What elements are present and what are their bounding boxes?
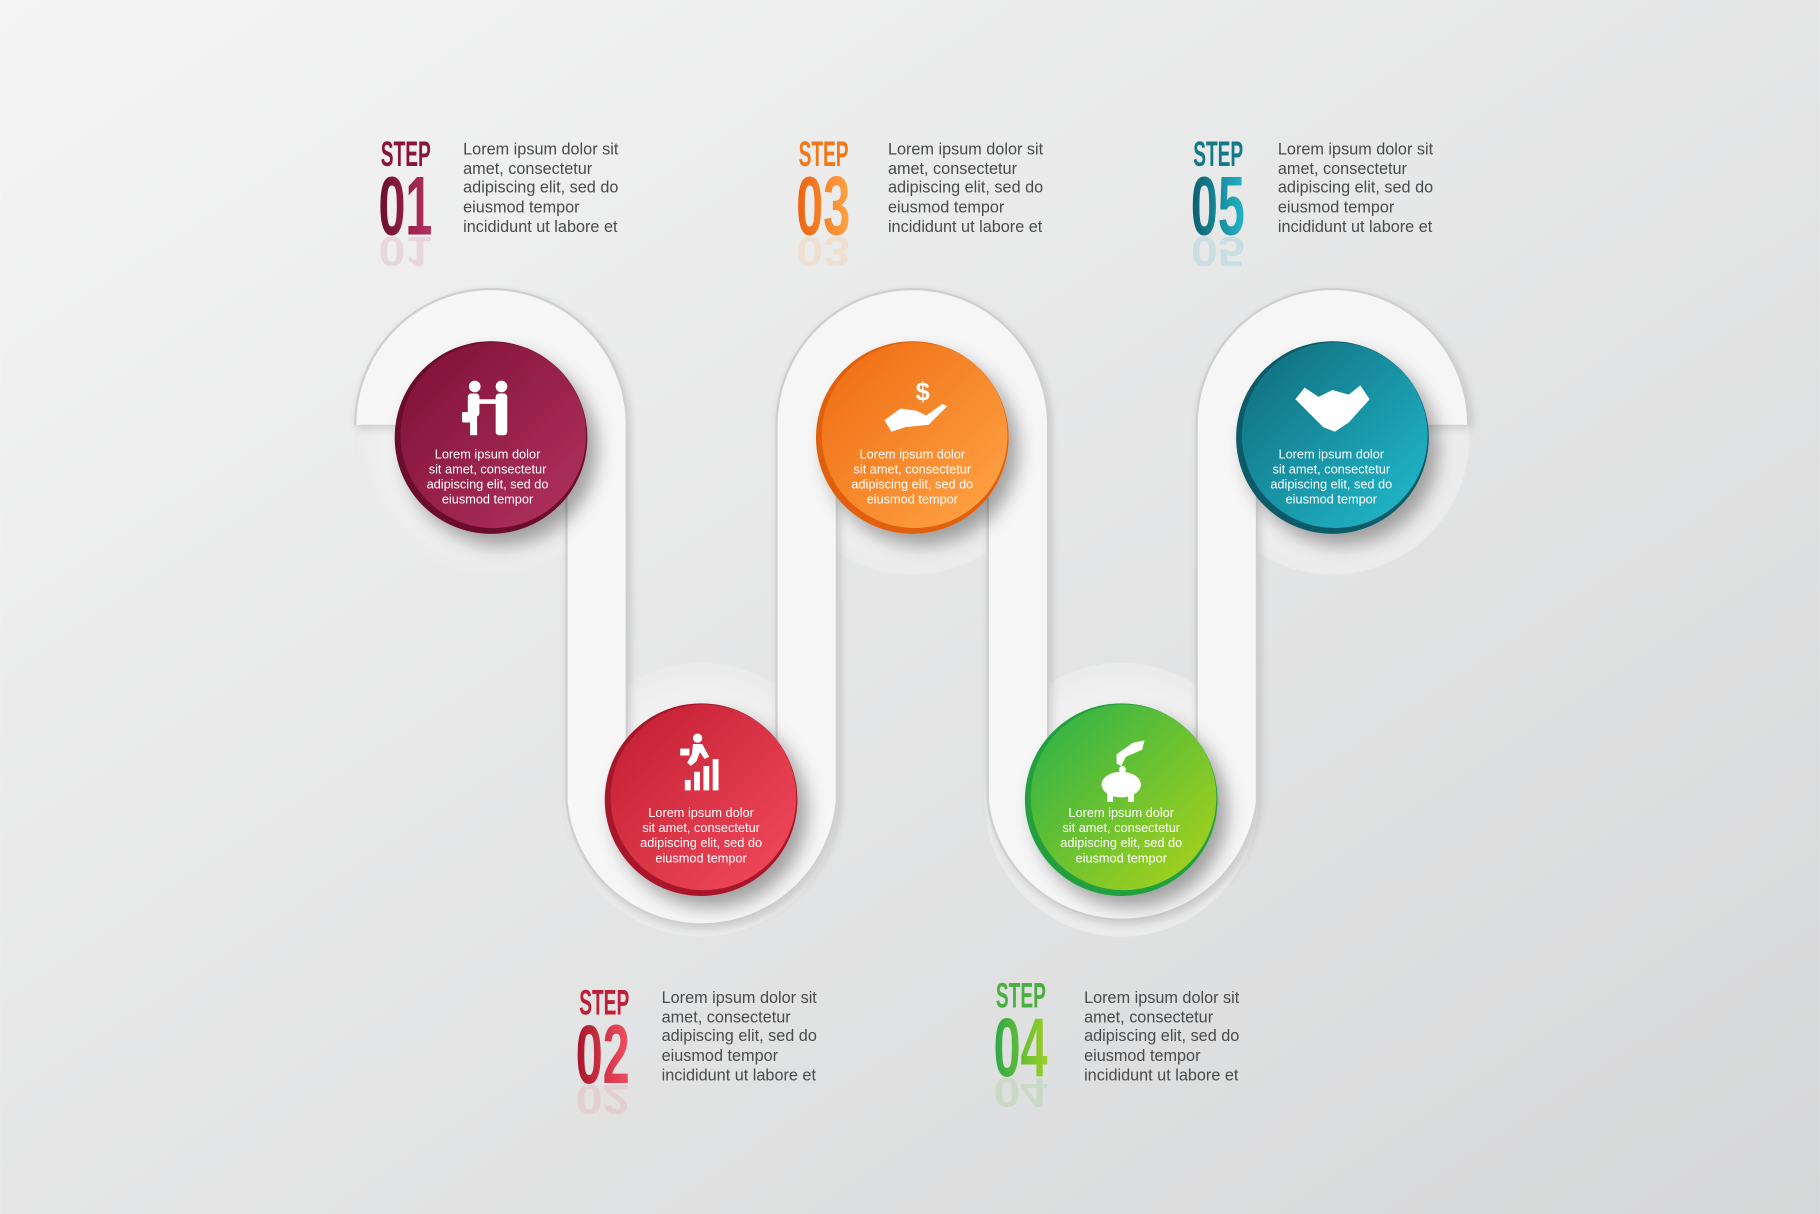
halos [354,301,1469,937]
step 05 label: 05 [1191,228,1245,275]
circle 5 [1236,341,1429,534]
circle 1: adipiscing elit, sed do [427,477,548,492]
circle 1 [395,341,587,534]
circle 1: Lorem ipsum dolor [435,446,541,461]
circle 5: sit amet, consectetur [1272,462,1391,477]
step 02 label [576,983,630,1123]
circle 3: adipiscing elit, sed do [851,477,973,492]
step 03 text: amet, consectetur [888,160,1018,178]
circle 3: Lorem ipsum dolor [860,446,966,461]
icon: growth chart [680,734,718,790]
step 04 label: STEP [996,976,1046,1015]
step 05 label: STEP [1193,135,1243,173]
step 04 text: Lorem ipsum dolor sit [1084,989,1240,1007]
step 02 text: Lorem ipsum dolor sit [662,989,817,1007]
step 04 text: amet, consectetur [1084,1008,1214,1026]
circle 3: sit amet, consectetur [854,462,972,477]
icon: handshake people [462,381,507,435]
step 03 label: 03 [796,160,850,253]
circle 4 [1025,703,1218,896]
icon: hand with dollar: $ [916,378,930,406]
circle 1: sit amet, consectetur [429,462,547,477]
circle 3: eiusmod tempor [867,492,959,507]
circle 2: adipiscing elit, sed do [640,835,762,850]
icon: hand with dollar [884,378,947,432]
step 03 label [796,135,850,275]
step 02 label: 02 [576,1008,630,1101]
step 05 text: amet, consectetur [1278,160,1408,178]
circle 3 [816,341,1009,534]
step 02 text: incididunt ut labore et [662,1067,816,1085]
circle 4: Lorem ipsum dolor [1068,805,1175,820]
serpentine track [385,319,1438,894]
step 02 text: eiusmod tempor [662,1047,779,1065]
step 01 label: 01 [378,160,432,253]
circle 4: adipiscing elit, sed do [1060,835,1182,850]
step 03 text: Lorem ipsum dolor sit [888,140,1044,158]
step 02 text: adipiscing elit, sed do [662,1027,817,1045]
step 01 label: STEP [381,135,431,173]
step 03 text: incididunt ut labore et [888,218,1043,236]
step 01 label [378,135,432,275]
step 03 text: adipiscing elit, sed do [888,179,1043,197]
circle 5: Lorem ipsum dolor [1279,446,1385,461]
circle 2: sit amet, consectetur [642,820,761,835]
step 01 label: 01 [378,228,432,275]
step 03 text: eiusmod tempor [888,198,1005,216]
step 05 text: incididunt ut labore et [1278,218,1433,236]
step 01 text: eiusmod tempor [463,198,580,216]
step 04 label [994,976,1047,1116]
step 01 text: incididunt ut labore et [463,218,618,236]
step 04 label: 04 [994,1069,1047,1116]
circle 2 [605,703,797,896]
step 04 label: 04 [994,1001,1047,1094]
step 05 text: adipiscing elit, sed do [1278,179,1433,197]
circle 5: eiusmod tempor [1286,492,1378,507]
step 03 label: STEP [799,135,849,173]
circle 2: eiusmod tempor [655,850,748,865]
step 05 label: 05 [1191,160,1245,253]
step 02 label: STEP [579,983,629,1022]
step 04 text: eiusmod tempor [1084,1047,1201,1065]
step 05 text: eiusmod tempor [1278,198,1395,216]
step 04 text: adipiscing elit, sed do [1084,1027,1239,1045]
icon: piggy bank [1102,740,1144,802]
step 01 text: Lorem ipsum dolor sit [463,140,619,158]
circle 4: sit amet, consectetur [1062,820,1181,835]
step 04 text: incididunt ut labore et [1084,1067,1239,1085]
icon: handshake [1295,385,1370,432]
step 01 text: adipiscing elit, sed do [463,179,618,197]
step 02 label: 02 [576,1076,630,1123]
circle 2: Lorem ipsum dolor [648,805,755,820]
step 05 label [1191,135,1245,275]
step 03 label: 03 [796,228,850,275]
step 05 text: Lorem ipsum dolor sit [1278,140,1434,158]
step 02 text: amet, consectetur [662,1008,791,1026]
circle 1: eiusmod tempor [442,492,534,507]
circle 5: adipiscing elit, sed do [1270,477,1392,492]
step 01 text: amet, consectetur [463,160,593,178]
circle 4: eiusmod tempor [1076,850,1168,865]
